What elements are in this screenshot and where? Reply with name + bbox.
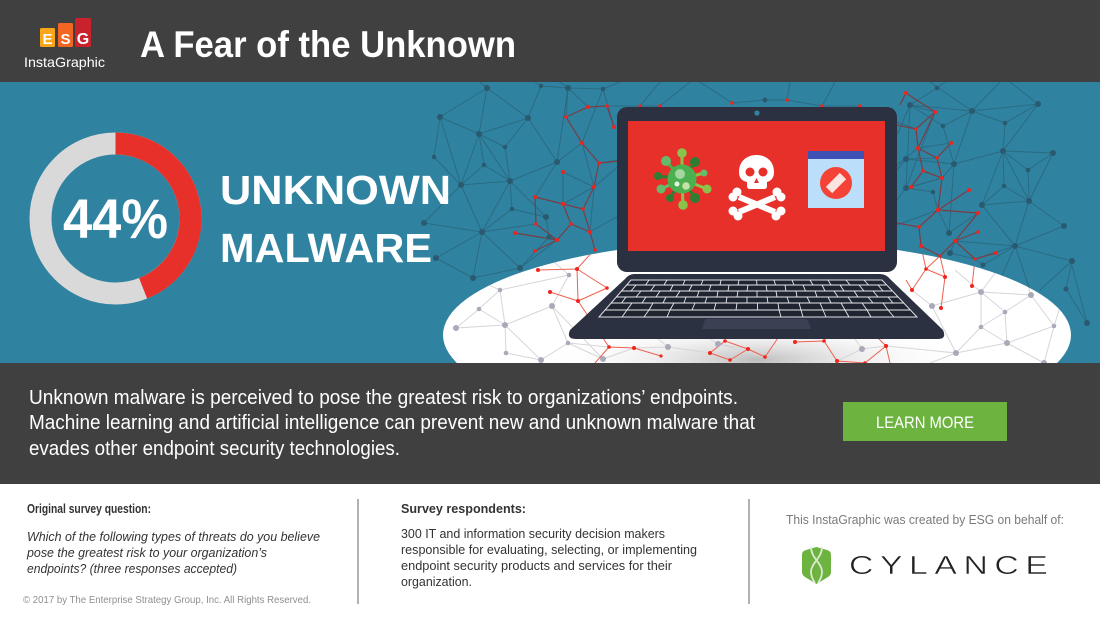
laptop base [569,274,944,339]
footer panel: survey respondents: responsible for evaluating, selecting, or implementing [401,543,697,557]
copyright: © 2017 by The Enterprise Strategy Group, Inc. All Rights Reserved. [23,594,311,606]
footer panel: survey respondents: 300 IT and information security decision makers [401,527,665,541]
footer panel: survey respondents: Survey respondents: [401,502,526,516]
ESG InstaGraphic logo: S [60,31,71,48]
footer panel: survey respondents: organization. [401,575,472,589]
footer panel: survey question [26,502,320,576]
survey question text: pose the greatest risk to your organization’s [26,546,267,560]
description text: Unknown malware is perceived to pose the greatest risk to organizations’ endpoints. [29,387,738,409]
ESG InstaGraphic logo: E [42,31,53,48]
button: learn more: LEARN MORE [876,413,974,432]
footer panel: survey question: Original survey question: [27,502,151,516]
network pattern on white [453,254,1060,363]
icon: blocked window [808,151,864,208]
donut value: 44% [63,187,168,250]
survey question text: Which of the following types of threats do you believe [27,530,320,544]
heading: unknown malware: UNKNOWN [220,167,451,213]
icon: virus [654,148,712,210]
icon: skull and crossbones [728,155,786,220]
title: A Fear of the Unknown [140,24,516,65]
button: learn more [843,402,1007,441]
footer panel: sponsor: This InstaGraphic was created by ESG on behalf of: [786,513,1064,527]
heading: unknown malware: MALWARE [220,225,432,271]
network pattern on teal [421,82,1090,363]
header bar [0,0,1100,82]
description text: evades other endpoint security technologies. [29,438,400,460]
Cylance wordmark: CYLANCE [849,552,1048,580]
laptop screen [617,107,897,272]
footer panel: survey respondents [401,502,697,589]
keyboard [599,280,917,317]
description band [0,363,1100,484]
footer panel: survey respondents: endpoint security products and services for their [401,559,672,573]
heading: unknown malware [220,167,451,271]
description text [29,387,755,460]
description text: Machine learning and artificial intelligence can prevent new and unknown malware that [29,412,755,434]
survey question text [26,530,320,576]
hero panel: unknown malware [0,82,1100,363]
donut chart: 44% [40,144,190,294]
laptop [569,107,944,339]
ESG InstaGraphic logo [24,18,105,70]
footer panel: sponsor [786,513,1064,584]
icon: Cylance shield [802,547,831,584]
white ellipse backdrop [443,250,1071,363]
ESG InstaGraphic logo: G [77,31,89,48]
ESG InstaGraphic logo: InstaGraphic [24,54,105,70]
survey question text: endpoints? (three responses accepted) [27,562,237,576]
trackpad [702,319,811,329]
